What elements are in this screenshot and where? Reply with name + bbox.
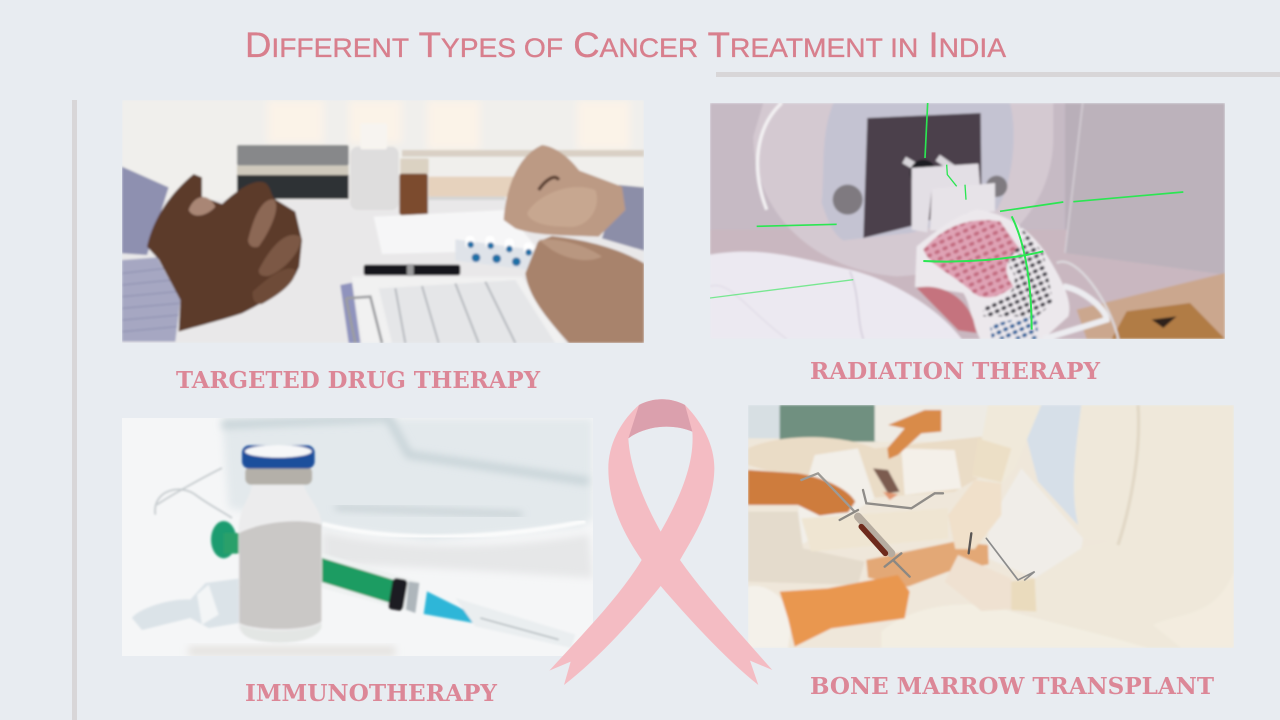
photo: targeted drug therapy [122, 100, 644, 343]
photo: radiation therapy [710, 103, 1225, 339]
label: radiation therapy: RADIATION THERAPY [810, 358, 1101, 385]
label: immunotherapy: IMMUNOTHERAPY [245, 680, 498, 707]
photo: bone marrow transplant [748, 405, 1234, 648]
icon: pink awareness ribbon [549, 399, 772, 685]
title: DIFFERENT TYPES OF CANCER TREATMENT IN INDIA [245, 26, 1006, 65]
label: bone marrow transplant: BONE MARROW TRANSPLANT [810, 673, 1214, 700]
photo: immunotherapy [122, 418, 593, 656]
label: targeted drug therapy: TARGETED DRUG THERAPY [176, 367, 541, 394]
ribbon top fold [628, 399, 692, 438]
